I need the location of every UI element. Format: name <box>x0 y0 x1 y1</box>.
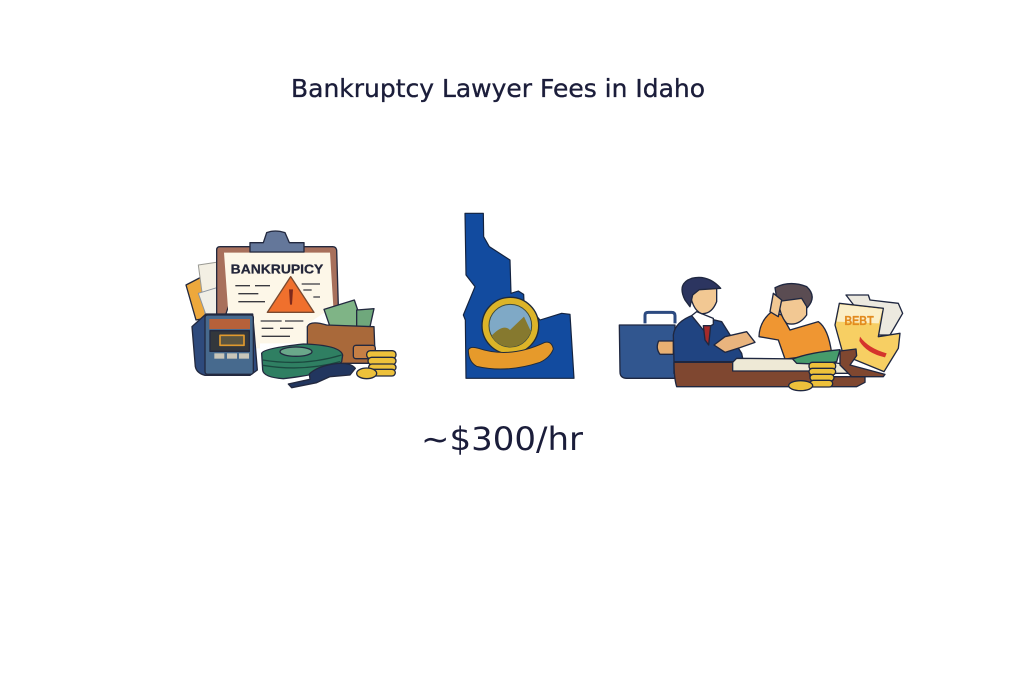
state outline <box>463 213 574 378</box>
title: Bankruptcy Lawyer Fees in Idaho <box>291 74 705 103</box>
warning triangle <box>267 277 314 312</box>
lawyer <box>673 277 755 362</box>
document lines <box>235 284 320 336</box>
icon: lawyer advising a client at a desk <box>619 277 903 391</box>
folder labelled debt: BEBT <box>844 314 874 328</box>
icon: Idaho state map with seal <box>463 213 574 378</box>
gold coins <box>789 362 836 391</box>
calculator <box>192 314 257 375</box>
client <box>759 284 832 359</box>
gold coins <box>357 351 396 379</box>
desk <box>674 349 885 387</box>
icon: bankruptcy documents, calculator, wallet and cash <box>186 231 396 388</box>
briefcase <box>619 312 675 378</box>
stack of cash <box>262 344 343 379</box>
motto banner <box>468 342 553 369</box>
wallet with banknotes <box>307 300 375 363</box>
hourly fee: ~$300/hr <box>421 420 584 458</box>
back folder and papers <box>186 262 227 320</box>
clipboard <box>217 231 338 348</box>
state seal <box>482 297 539 354</box>
cash on desk <box>793 350 840 364</box>
car key <box>288 363 355 388</box>
clipboard heading: BANKRUPICY <box>231 261 323 276</box>
folder labelled debt <box>835 295 903 372</box>
